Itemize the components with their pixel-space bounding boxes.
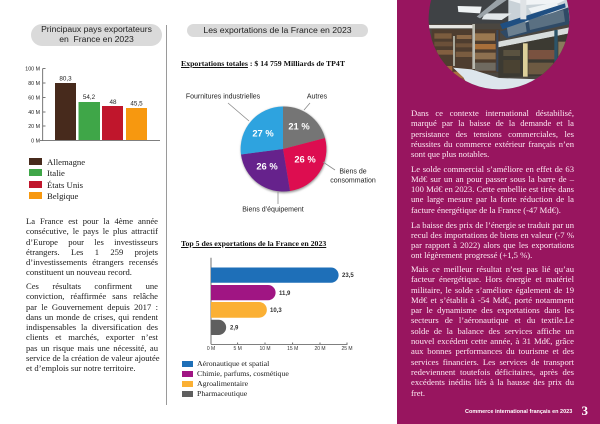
text block: energy prices: recul des importations de biens en valeur (-7 % <box>411 230 574 240</box>
pie chart: exports by category: Biens de <box>339 168 367 176</box>
legend: exporting countries: Italie <box>47 168 65 178</box>
pie chart: exports by category: Fournitures industrielles <box>186 94 261 100</box>
text block: international context <box>411 108 574 159</box>
text block: France attractiveness: d’investissements étrangers recensés <box>26 257 158 267</box>
text block: better result analysis: solde de la balance des services affiche un <box>411 326 574 336</box>
page number: 3 <box>582 403 588 418</box>
bar chart: exporting countries: 0 M <box>31 138 40 144</box>
text block: energy prices: par rapport à 2022) alors que les exportations <box>411 240 574 250</box>
heading: principal exporting countries: Principaux pays exportateurs <box>41 24 152 34</box>
text block: trade balance: Md€ sur un an pour passer sous la barre de – <box>411 174 574 184</box>
text block: better result analysis: nouvel excédent cette année, à 31 Md€, grâce <box>411 336 574 346</box>
legend: exporting countries: Allemagne <box>47 157 85 167</box>
pie chart: exports by category: 21 % <box>288 120 310 132</box>
text block: government conviction: Ces résultats confirment une <box>26 281 158 291</box>
footer: publication title: Commerce international français en 2023 <box>465 409 572 415</box>
text block: international context: persistance des tensions commerciales, les <box>411 129 574 139</box>
panel: left column divider <box>166 25 167 405</box>
text block: government conviction: indispensables la diversification des <box>26 322 158 332</box>
legend: top exports: Pharmaceutique <box>197 389 247 398</box>
text block: better result analysis: secteurs de l’aéronautique et du textile.Le <box>411 315 574 325</box>
bar chart: exporting countries: 80,3 <box>59 76 72 83</box>
bar chart: exporting countries: 40 M <box>28 110 40 116</box>
pie chart: exports by category: Biens d’équipement <box>242 206 304 214</box>
bar chart: exporting countries: 48 <box>109 99 117 106</box>
bar chart: top exports <box>207 258 354 352</box>
text block: international context: réussites du commerce extérieur français n’en <box>411 139 574 149</box>
bar chart: exporting countries: 20 M <box>28 124 40 130</box>
text block: trade balance: une large mesure par la forte réduction de la <box>411 194 574 204</box>
text block: trade balance: Le solde commercial s’améliore en effet de 63 <box>411 164 574 174</box>
legend: exporting countries: Belgique <box>47 191 78 201</box>
text block: better result analysis <box>411 264 574 398</box>
pie chart: exports by category: 27 % <box>252 128 274 138</box>
text block: better result analysis: facteur énergétique. Hors énergie et matériel <box>411 274 574 284</box>
bar chart: top exports: 10,3 <box>270 308 282 314</box>
pie chart: exports by category: 26 % <box>294 154 316 164</box>
text block: France attractiveness: La France est pour la 4ème année <box>26 216 158 226</box>
text block: energy prices: ont légèrement progressé (+1,5 %). <box>411 250 532 260</box>
text block: energy prices: La baisse des prix de l’énergie se traduit par un <box>411 220 574 230</box>
bar chart: exporting countries <box>25 66 160 144</box>
text block: energy prices <box>411 220 574 260</box>
legend: exporting countries: États Unis <box>47 180 83 190</box>
heading: French exports 2023: Les exportations de la France en 2023 <box>203 25 352 35</box>
heading: top 5 exports: Top 5 des exportations de la France en 2023 <box>181 239 326 248</box>
bar chart: top exports: 25 M <box>341 346 353 352</box>
text block: better result analysis: par le dynamisme des exportations dans les <box>411 305 574 315</box>
text block: better result analysis: fret. <box>411 388 425 398</box>
text block: better result analysis: redeviennent toutefois déficitaires, après des <box>411 367 574 377</box>
bar chart: top exports: 11,9 <box>279 291 291 297</box>
image: warehouse photo circle <box>428 0 570 90</box>
text block: better result analysis: Mais ce meilleur résultat n’est pas lié qu’au <box>411 264 574 274</box>
text block: international context: marqué par la baisse de la demande et la <box>411 118 574 128</box>
text block: government conviction: conviction, réaffirmée sans relâche <box>26 291 158 301</box>
heading: principal exporting countries <box>31 24 162 46</box>
bar chart: top exports: 0 M <box>207 346 215 352</box>
bar chart: exporting countries: 60 M <box>28 96 40 102</box>
bar chart: top exports: 5 M <box>234 346 242 352</box>
bar chart: exporting countries: 45,5 <box>130 100 143 108</box>
bar chart: top exports: 2,9 <box>230 326 239 332</box>
pie chart: exports by category: consommation <box>330 178 376 184</box>
pie chart: exports by category: Autres <box>307 94 328 100</box>
bar chart: exporting countries: 54,2 <box>83 94 96 101</box>
bar chart: exporting countries: 80 M <box>28 81 40 87</box>
bar chart: top exports: 23,5 <box>342 273 354 279</box>
text block: international context: sont que plus notables. <box>411 149 489 159</box>
text block: better result analysis: Md€ et s’établit à -54 Md€, porté notamment <box>411 295 574 305</box>
panel: right magenta column <box>397 0 600 424</box>
heading: total exports: Exportations totales : $ 14 759 Milliards de TP4T <box>181 58 345 68</box>
text block: government conviction: clients et marchés, exporter n’est <box>26 332 158 342</box>
bar chart: top exports: 10 M <box>259 346 271 352</box>
text block: France attractiveness: étrangers. Les 1 259 projets <box>26 247 158 257</box>
legend: top exports: Chimie, parfums, cosmétique <box>197 369 289 378</box>
bar chart: top exports: 15 M <box>287 346 298 352</box>
pie chart: exports by category <box>186 93 376 214</box>
text block: better result analysis: services financiers. Les services de transport <box>411 357 574 367</box>
text block: trade balance <box>411 164 574 215</box>
legend: exporting countries <box>29 157 85 201</box>
text block: France attractiveness <box>26 216 158 277</box>
text block: trade balance: 100 Md€ en 2023. Cette embellie est tirée dans <box>411 184 574 194</box>
bar chart: exporting countries: 100 M <box>25 66 40 72</box>
text block: government conviction: pas un risque mais une nécessité, au <box>26 343 158 353</box>
text block: international context: Dans ce contexte international déstabilisé, <box>411 108 574 118</box>
pie chart: exports by category: 26 % <box>256 160 278 172</box>
text block: France attractiveness: constituent un nouveau record. <box>26 267 132 277</box>
text block: better result analysis: aux bonnes performances du tourisme et des <box>411 346 574 356</box>
legend: top exports <box>182 359 289 398</box>
legend: top exports: Aéronautique et spatial <box>197 359 269 368</box>
text block: trade balance: facture énergétique de la France (-47 Md€). <box>411 205 561 215</box>
text block: government conviction: service de la création de valeur ajoutée <box>26 353 160 363</box>
text block: government conviction: par le Gouvernement depuis 2017 : <box>26 302 158 312</box>
text block: better result analysis: excédents inédits liés à la hausse des prix du <box>411 377 574 387</box>
text block: government conviction <box>26 281 160 373</box>
heading: principal exporting countries: en France en 2023 <box>59 34 134 44</box>
text block: government conviction: dans un monde de crises, qui rendent <box>26 312 158 322</box>
text block: government conviction: et d’emplois sur notre territoire. <box>26 363 136 373</box>
legend: top exports: Agroalimentaire <box>197 379 248 388</box>
text block: France attractiveness: d’Europe pour les investisseurs <box>26 237 158 247</box>
heading: French exports 2023 <box>187 24 368 37</box>
text block: better result analysis: militaire, le solde s’améliore également de 19 <box>411 285 574 295</box>
text block: France attractiveness: consécutive, le pays le plus attractif <box>26 226 158 236</box>
bar chart: top exports: 20 M <box>314 346 326 352</box>
